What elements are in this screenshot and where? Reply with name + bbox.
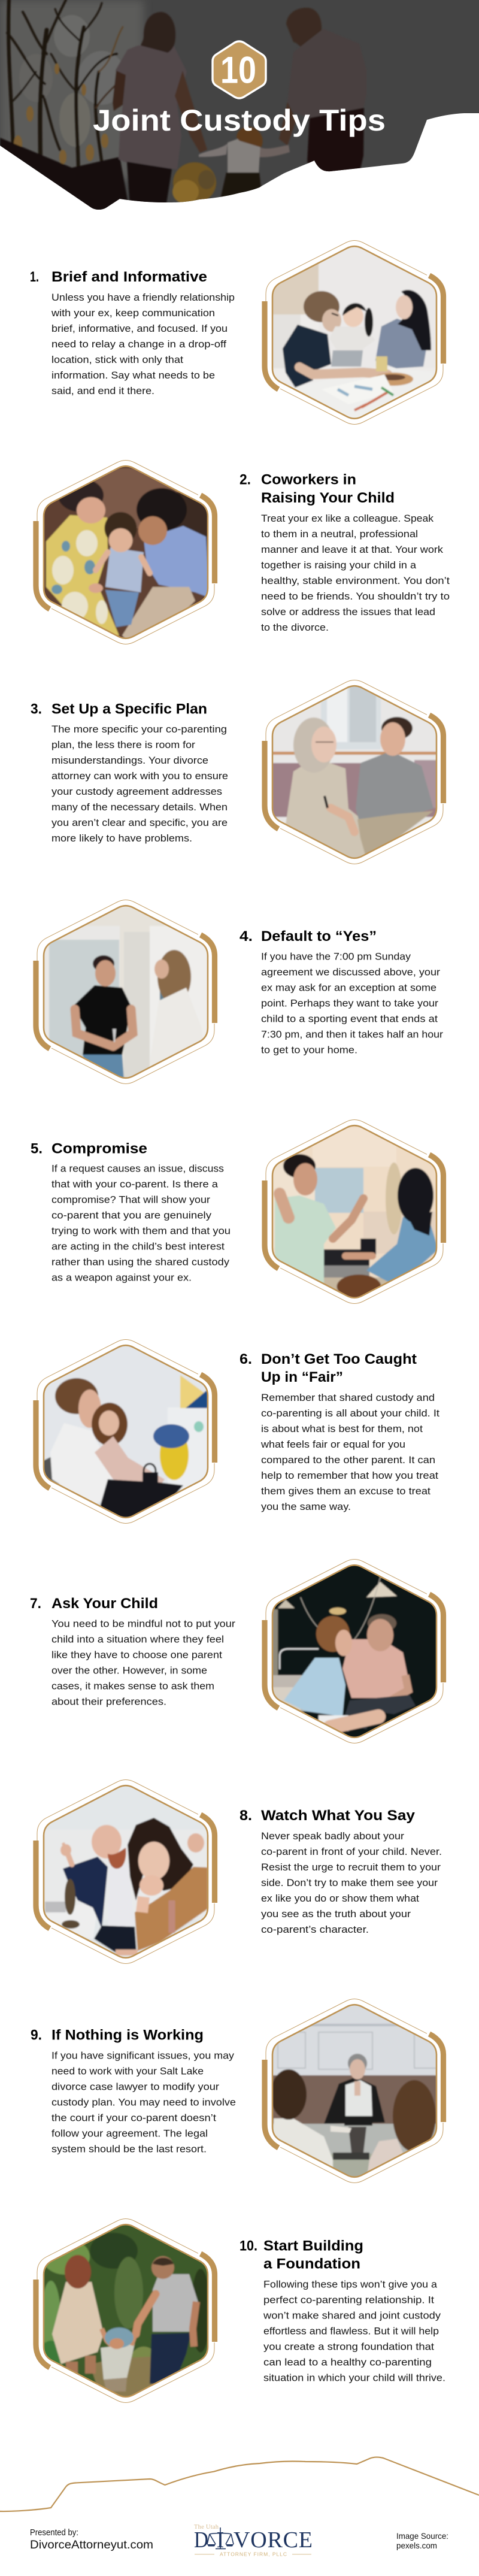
text: tip 8	[261, 1831, 442, 1935]
text: tip 1: with your ex, keep communication	[51, 308, 215, 319]
text: tip 9: need to work with your Salt Lake	[51, 2066, 204, 2077]
text: tip 9: follow your agreement. The legal	[51, 2129, 208, 2139]
text: tip 9: system should be the last resort.	[51, 2144, 207, 2155]
text: tip 6: Remember that shared custody and	[261, 1393, 435, 1403]
text: tip 2: need to be friends. You shouldn’t try to	[261, 591, 450, 602]
text: tip 4: to get to your home.	[261, 1045, 357, 1056]
text: tip 6: what feels fair or equal for you	[260, 1439, 405, 1450]
heading: tip 9: 9.	[31, 2027, 42, 2044]
footer: presented by: DivorceAttorneyut.com	[30, 2539, 153, 2551]
hexagon photo: frustrated couple with lawyer's statue	[36, 1780, 214, 1963]
text: tip 10: can lead to a healthy co-parenting	[263, 2357, 432, 2368]
heading: tip 2: Coworkers in	[261, 472, 356, 488]
text: tip 2: healthy, stable environment. You don’t	[261, 576, 450, 586]
logo: The Utah Divorce Attorney Firm: D	[194, 2527, 208, 2553]
footer: image source: Image Source:	[396, 2531, 448, 2541]
hexagon photo: father and son on bed	[265, 1560, 443, 1743]
heading: tip 6: Up in “Fair”	[261, 1369, 343, 1385]
footer mountain line	[0, 2457, 479, 2511]
text: tip 4: agreement we discussed above, your	[261, 967, 441, 978]
text: tip 6	[260, 1393, 439, 1512]
text: tip 1: information. Say what needs to be	[51, 370, 215, 381]
hexagon photo: family walking in forest	[36, 2219, 214, 2402]
text: tip 3: more likely to have problems.	[51, 833, 192, 844]
logo: The Utah Divorce Attorney Firm: The Utah	[194, 2524, 219, 2530]
header: dark family photo with wavy bottom edge	[0, 0, 479, 216]
heading: tip 5: Compromise	[51, 1140, 147, 1157]
text: tip 2: Treat your ex like a colleague. Speak	[261, 513, 434, 524]
text: tip 2: together is raising your child in a	[261, 560, 417, 571]
text: tip 5: co-parent that you are genuinely	[51, 1210, 212, 1221]
hexagon photo: couple on sofa	[265, 680, 443, 864]
text: tip 3: misunderstandings. Your divorce	[51, 755, 208, 766]
text: tip 3: The more specific your co-parenting	[51, 724, 227, 735]
heading: tip 10: a Foundation	[263, 2256, 360, 2272]
text: tip 10: situation in which your child will thrive.	[263, 2372, 445, 2383]
text: tip 4: ex may ask for an exception at some	[261, 983, 436, 994]
text: tip 9: custody plan. You may need to involve	[51, 2097, 236, 2108]
hexagon photo: couple seated in white room	[36, 1340, 214, 1523]
heading: tip 1: 1.	[30, 269, 39, 285]
hexagon photo: couple arguing in kitchen	[265, 1120, 443, 1303]
text: tip 6: you the same way.	[261, 1502, 351, 1512]
text: tip 3	[51, 724, 228, 844]
text: tip 1: location, stick with only that	[51, 355, 183, 365]
panel: tip 4	[36, 900, 444, 1083]
text: tip 7: cases, it makes sense to ask them	[51, 1681, 214, 1691]
text: tip 9	[51, 2051, 236, 2155]
heading: tip 1: Brief and Informative	[51, 269, 207, 285]
text: tip 7: child into a situation where they feel	[51, 1634, 224, 1645]
text: tip 8: ex like you do or show them what	[261, 1893, 419, 1904]
hexagon photo: man and woman talking	[36, 900, 214, 1083]
heading: tip 7: 7.	[30, 1596, 41, 1612]
panel: tip 7	[30, 1560, 443, 1743]
heading: tip 4: Default to “Yes”	[261, 928, 377, 945]
heading: tip 4: 4.	[240, 928, 253, 945]
heading: tip 2: 2.	[240, 472, 251, 488]
footer: image source	[396, 2531, 448, 2550]
logo: The Utah Divorce Attorney Firm: VORCE	[234, 2527, 313, 2553]
hexagon photo: family at table	[265, 241, 443, 424]
text: tip 4: child to a sporting event that ends at	[261, 1014, 438, 1025]
panel: tip 3	[31, 680, 443, 864]
heading: tip 10: 10.	[240, 2238, 257, 2254]
heading: tip 7: Ask Your Child	[51, 1596, 158, 1612]
hexagon photo: counselor facing couple	[265, 1999, 443, 2183]
text: tip 3: you aren’t clear and specific, you are	[51, 818, 228, 828]
text: tip 6: is about what is best for them, not	[261, 1424, 423, 1434]
heading: tip 8: 8.	[240, 1808, 252, 1824]
logo: The Utah Divorce Attorney Firm: ATTORNEY FIRM, PLLC	[220, 2551, 287, 2557]
heading: tip 10	[240, 2238, 363, 2272]
text: tip 2: solve or address the issues that lead	[261, 607, 435, 617]
text: tip 9: the court if your co-parent doesn’t	[51, 2113, 216, 2124]
text: tip 5: rather than using the shared custody	[51, 1257, 230, 1268]
text: tip 3: many of the necessary details. When	[51, 802, 228, 813]
heading: tip 6	[240, 1351, 417, 1385]
panel: tip 9	[31, 1999, 443, 2183]
logo: The Utah Divorce Attorney Firm: I	[217, 2527, 224, 2553]
text: tip 9: divorce case lawyer to modify your	[51, 2082, 220, 2093]
heading: tip 10: Start Building	[263, 2238, 363, 2254]
text: tip 1: Unless you have a friendly relationship	[51, 292, 235, 303]
footer: image source: pexels.com	[396, 2541, 437, 2550]
text: tip 5: are acting in the child’s best interest	[51, 1242, 225, 1252]
panel: tip 5	[31, 1120, 443, 1303]
text: tip 5: as a weapon against your ex.	[51, 1273, 192, 1284]
text: tip 7: over the other. However, in some	[51, 1665, 207, 1676]
heading: tip 9: If Nothing is Working	[51, 2027, 204, 2044]
panel: tip 1	[30, 241, 443, 424]
text: tip 4	[261, 952, 444, 1056]
text: tip 5: trying to work with them and that you	[51, 1226, 231, 1237]
text: tip 7: about their preferences.	[51, 1696, 166, 1707]
text: tip 7: You need to be mindful not to put your	[51, 1618, 236, 1629]
text: tip 10: effortless and flawless. But it will help	[263, 2326, 439, 2336]
panel: tip 2	[36, 461, 450, 644]
text: tip 2: to them in a neutral, professional	[261, 529, 418, 540]
text: tip 3: plan, the less there is room for	[51, 740, 196, 750]
text: tip 2: to the divorce.	[261, 622, 329, 633]
text: tip 10	[263, 2279, 445, 2383]
heading: tip 3: 3.	[31, 701, 42, 718]
text: tip 10: perfect co-parenting relationship. It	[263, 2295, 434, 2305]
text: tip 8: co-parent’s character.	[261, 1924, 369, 1935]
heading: tip 6: 6.	[240, 1351, 252, 1367]
heading: tip 5: 5.	[31, 1140, 43, 1157]
text: tip 10: Following these tips won’t give you a	[263, 2279, 438, 2290]
text: tip 1	[51, 292, 235, 396]
hexagon photo: parents with toddler	[36, 461, 214, 644]
text: tip 6: help to remember that how you treat	[261, 1470, 438, 1481]
text: tip 6: co-parenting is all about your child. It	[261, 1408, 439, 1419]
badge: number 10 hexagon	[213, 41, 266, 98]
text: tip 8: co-parent in front of your child. Never.	[261, 1847, 442, 1857]
text: tip 10: you create a strong foundation that	[263, 2341, 434, 2352]
text: tip 10: won’t make shared and joint custody	[263, 2310, 441, 2321]
text: tip 5	[51, 1164, 231, 1284]
text: tip 6: them gives them an excuse to treat	[261, 1486, 431, 1497]
footer: presented by: Presented by:	[30, 2528, 78, 2538]
panel: tip 10	[36, 2219, 445, 2402]
text: tip 1: brief, informative, and focused. If you	[51, 323, 228, 334]
text: tip 5: If a request causes an issue, discuss	[51, 1164, 224, 1175]
text: tip 6: compared to the other parent. It can	[261, 1455, 435, 1466]
heading: tip 2: Raising Your Child	[261, 490, 395, 506]
text: tip 7	[51, 1618, 236, 1707]
logo: The Utah Divorce Attorney Firm	[194, 2524, 313, 2557]
panel: tip 8	[36, 1780, 442, 1963]
text: tip 3: your custody agreement addresses	[51, 786, 222, 797]
text: tip 2: manner and leave it at that. Your work	[261, 544, 444, 555]
text: tip 1: need to relay a change in a drop-off	[51, 339, 226, 350]
text: tip 2	[261, 513, 450, 633]
title: Joint Custody Tips	[93, 104, 386, 137]
text: tip 8: you see as the truth about your	[261, 1909, 411, 1920]
text: tip 3: attorney can work with you to ensure	[51, 771, 228, 782]
footer: presented by	[30, 2528, 153, 2551]
text: tip 9: If you have significant issues, you may	[51, 2051, 235, 2062]
text: tip 4: 7:30 pm, and then it takes half an hour	[261, 1030, 444, 1040]
text: tip 8: side. Don’t try to make them see your	[261, 1878, 438, 1888]
text: tip 8: Resist the urge to recruit them to your	[261, 1862, 441, 1873]
heading: tip 3: Set Up a Specific Plan	[51, 701, 207, 718]
text: tip 8: Never speak badly about your	[261, 1831, 405, 1842]
badge: number 10 hexagon: 10	[220, 49, 256, 91]
heading: tip 8: Watch What You Say	[261, 1808, 415, 1824]
text: tip 4: point. Perhaps they want to take your	[261, 998, 439, 1009]
text: tip 1: said, and end it there.	[51, 386, 154, 396]
heading: tip 2	[240, 472, 395, 506]
text: tip 7: like they have to choose one parent	[51, 1649, 222, 1660]
text: tip 5: compromise? That will show your	[51, 1195, 211, 1206]
text: tip 4: If you have the 7:00 pm Sunday	[261, 952, 411, 962]
heading: tip 6: Don’t Get Too Caught	[261, 1351, 417, 1367]
text: tip 5: that with your co-parent. Is there a	[51, 1179, 219, 1190]
panel: tip 6	[36, 1340, 439, 1523]
